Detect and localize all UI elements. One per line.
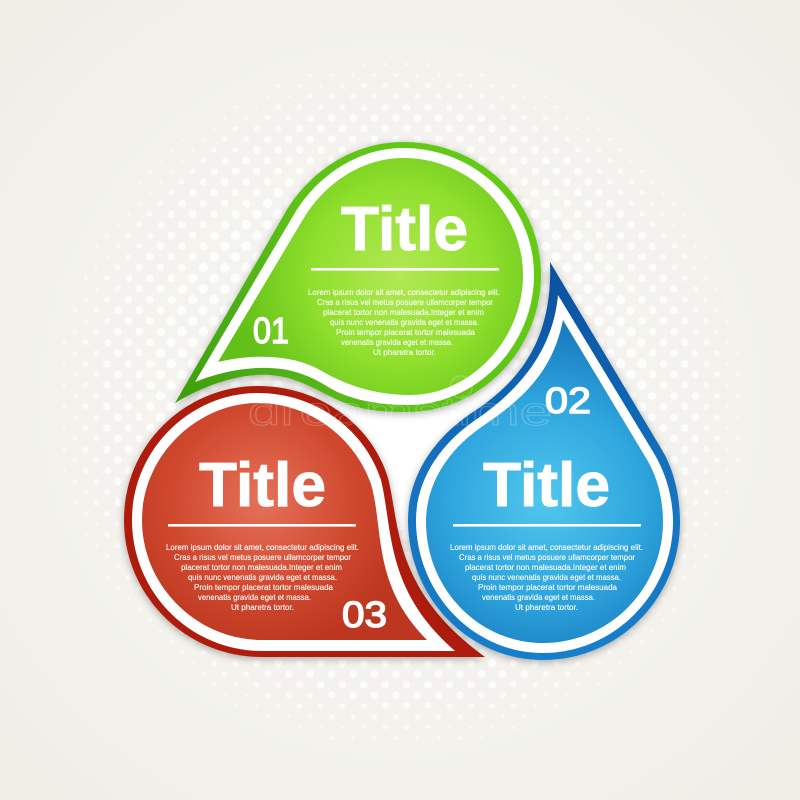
text block: green body: Proin tempor placerat tortor malesuada (336, 327, 475, 337)
blue drop shape (408, 262, 680, 660)
text block: red body: quis nunc venenatis gravida eget et massa. (188, 572, 337, 582)
panel: 03 red drop (124, 386, 485, 657)
red drop shape (124, 386, 485, 657)
text block: blue body: venenatis gravida eget et massa. (482, 592, 595, 602)
text block: red body: Lorem ipsum dolor sit amet, consectetur adipiscing elit. (166, 542, 359, 552)
heading: blue title: Title (483, 451, 610, 520)
text block: blue body: placerat tortor non malesuada.Integer et enim (465, 562, 626, 572)
number: 02: 02 (545, 380, 591, 421)
heading: green title: Title (341, 195, 468, 264)
divider: green (311, 268, 499, 271)
text block: red body: placerat tortor non malesuada.Integer et enim (181, 562, 342, 572)
white centre gap (320, 375, 530, 530)
text block: red body: Cras a risus vel metus posuere ullamcorper tempor (174, 552, 351, 562)
text block: blue body: Lorem ipsum dolor sit amet, consectetur adipiscing elit. (450, 542, 643, 552)
text block: red body: venenatis gravida eget et massa. (198, 592, 311, 602)
text block: green body: placerat tortor non malesuada.Integer et enim (323, 307, 484, 317)
green drop shape (175, 142, 541, 412)
text block: blue body: Proin tempor placerat tortor malesuada (478, 582, 617, 592)
text block: blue body (450, 542, 643, 612)
halftone dot pattern (66, 71, 734, 739)
panel: 01 green drop (175, 142, 541, 412)
text block: blue body: Ut pharetra tortor. (515, 602, 578, 612)
watermark (248, 376, 552, 434)
text block: green body (308, 287, 500, 357)
text block: blue body: Cras a risus vel metus posuere ullamcorper tempor (459, 552, 635, 562)
text block: red body: Ut pharetra tortor. (231, 602, 294, 612)
text block: green body: Ut pharetra tortor. (373, 347, 436, 357)
text block: blue body: quis nunc venenatis gravida eget et massa. (472, 572, 621, 582)
text block: green body: venenatis gravida eget et massa. (341, 337, 453, 347)
text block: green body: Lorem ipsum dolor sit amet, consectetur adipiscing elit. (308, 287, 500, 297)
watermark: dreamstime (248, 390, 552, 434)
text block: red body: Proin tempor placerat tortor malesuada (194, 582, 333, 592)
panel: 02 blue drop (408, 262, 680, 660)
number: 01: 01 (253, 310, 289, 351)
text block: red body (166, 542, 359, 612)
divider: red (168, 524, 356, 527)
heading: red title: Title (199, 451, 326, 520)
text block: green body: quis nunc venenatis gravida eget et massa. (330, 317, 479, 327)
number: 03: 03 (342, 594, 387, 635)
text block: green body: Cras a risus vel metus posuere ullamcorper tempor (317, 297, 493, 307)
divider: blue (453, 524, 641, 527)
